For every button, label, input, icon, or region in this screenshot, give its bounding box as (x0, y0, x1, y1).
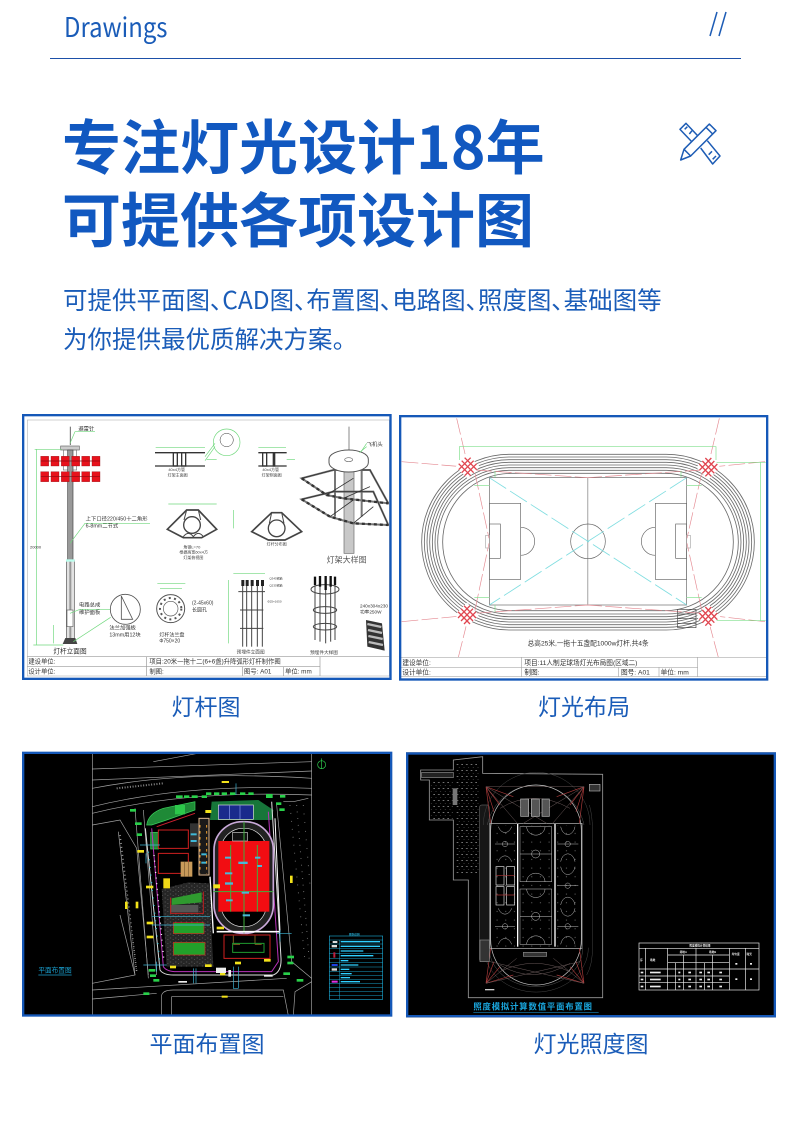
truss captions: 灯杆分布图 (267, 541, 287, 547)
white road tags (178, 968, 273, 983)
title block: 制图: (149, 666, 164, 675)
flange captions: 灯杆法兰盘 (159, 632, 184, 639)
title block: 单位: mm (285, 666, 312, 675)
header label: Drawings (64, 6, 167, 45)
note text: 总高25米,一拖十五盏配1000w灯杆,共4条 (528, 638, 649, 647)
thick dividers (518, 824, 555, 947)
pole labels: 电路总成 (79, 601, 101, 609)
south stand (480, 940, 547, 962)
title block: 建设单位: (28, 657, 56, 666)
title block: 项目:20米一拖十二(6+6盏)升降弧形灯杆制作图 (149, 657, 281, 666)
title block: 图号: A01 (621, 668, 650, 676)
title block: 设计单位: (402, 668, 431, 677)
title block: 单位: mm (661, 667, 689, 676)
red beam fans (486, 787, 584, 983)
icon: pencil and ruler (679, 122, 721, 165)
floodlight (360, 603, 388, 651)
anchor captions: Q345钢筋 (269, 576, 283, 581)
north arrow (318, 758, 326, 769)
anchor cage 3D (311, 576, 339, 643)
illuminance table: 场地A (680, 950, 687, 954)
title block: 建设单位: (402, 658, 431, 667)
title block: 制图: (524, 668, 540, 677)
main title (62, 101, 545, 258)
badminton courts (496, 867, 515, 905)
yellow tags (125, 781, 293, 998)
lamp frame 3D: 灯架大样图 (327, 555, 367, 565)
south building (224, 935, 270, 958)
header slashes (709, 12, 727, 36)
flange plate (157, 595, 185, 623)
flange captions: 长圆孔 (192, 607, 207, 614)
flange captions: (2-45x60) (192, 601, 214, 607)
pole labels (30, 424, 148, 656)
lamp frame 3D: 飞机头 (367, 440, 383, 448)
pole labels: 避雷针 (78, 424, 95, 432)
futsal courts (520, 827, 552, 944)
anchor captions (237, 576, 338, 656)
pole labels: 法兰加强板 (109, 623, 137, 631)
green dimension lines (33, 432, 367, 645)
start lines (678, 609, 696, 628)
light clusters (455, 455, 720, 629)
anchor captions: Φ25×1650 (267, 600, 282, 604)
main title: 可提供各项设计图 (62, 174, 534, 258)
green dimensions (459, 447, 766, 621)
truss captions: 40x4方管 (262, 466, 279, 472)
caption: illuminance plan: 灯光照度图 (534, 1025, 648, 1059)
truss captions (168, 466, 287, 560)
court dots (492, 825, 581, 947)
flange captions: Φ750×20 (159, 639, 180, 645)
truss captions: 灯架侧面图 (262, 472, 282, 478)
running track (422, 454, 754, 630)
dotted verges (117, 783, 310, 972)
illuminance table: 眩光 (747, 952, 752, 956)
floodlight: 功率250W (360, 609, 382, 616)
title block (401, 657, 766, 677)
truss captions: 灯架主面图 (168, 472, 188, 478)
red floodlights (41, 456, 100, 482)
caption: lighting layout: 灯光布局 (538, 688, 630, 722)
panel: site plan (22, 752, 392, 1017)
illuminance table: 照度模拟计算结果 (689, 944, 711, 948)
basketball courts (495, 827, 578, 944)
athletic track and red field (210, 818, 280, 933)
fan plan A (167, 510, 217, 538)
flange stiffener circle (110, 594, 140, 624)
anchor captions: Q235钢筋 (269, 583, 283, 588)
red beam lines (402, 418, 765, 657)
lamp frame 3D (302, 427, 388, 565)
illuminance table: 场地 (650, 958, 656, 962)
west buildings and courts (158, 818, 213, 967)
stadium ovals (483, 772, 593, 992)
title block (27, 420, 389, 676)
truss captions: 灯架俯视图 (183, 554, 203, 560)
drawing title: 平面布置图 (38, 966, 72, 975)
anchor cage elevation (238, 580, 265, 647)
anchor captions: 预埋件大样图 (310, 649, 338, 656)
pole labels: 20000 (30, 545, 42, 550)
building outline (421, 757, 603, 998)
panel: illuminance plan (406, 752, 776, 1018)
main title: 专注灯光设计18年 (62, 101, 545, 186)
panel: pole drawing (22, 414, 392, 680)
title block: 图号: A01 (244, 667, 272, 675)
title block: 设计单位: (28, 666, 56, 675)
intro text (63, 282, 662, 356)
anchor captions: 预埋件立面图 (237, 649, 265, 656)
fan plan B (252, 513, 302, 540)
pole labels: 上下口径220/450十二角形 (86, 514, 148, 522)
header rule (50, 58, 741, 59)
illuminance table: 均匀度 (732, 952, 740, 956)
pole labels: 6-8mm二节式 (86, 522, 119, 530)
blue tennis court (218, 805, 253, 819)
truss details (155, 429, 287, 466)
caption: pole drawing: 灯杆图 (172, 688, 240, 722)
legend table (329, 932, 383, 999)
pole labels: 灯杆立面图 (53, 647, 87, 656)
intro text: 为你提供最优质解决方案。 (63, 321, 345, 356)
pole labels: 维护面板 (79, 608, 101, 616)
soccer field (486, 478, 690, 605)
cyan aiming lines (489, 478, 687, 605)
caption: site plan: 平面布置图 (150, 1025, 264, 1059)
floodlight: 240x304x230 (360, 603, 388, 608)
panel: lighting layout (399, 415, 768, 681)
illuminance table (639, 943, 759, 990)
cyan utility marks (140, 783, 292, 988)
flange captions (159, 601, 214, 645)
pole elevation (61, 427, 79, 644)
pole labels: 13mm用12块 (109, 631, 141, 639)
roads (92, 752, 312, 1016)
truss captions: 角钢L=70 (183, 543, 201, 549)
top small courts (521, 799, 549, 816)
site boundary and green belt (145, 800, 281, 975)
illuminance table: 序 (640, 958, 643, 962)
truss captions: 根据高宽60x4方 (179, 549, 208, 555)
intro text: 可提供平面图、CAD图、布置图、电路图、照度图、基础图等 (63, 282, 662, 317)
illuminance table: 场地B (709, 950, 716, 954)
truss captions: 40x4方管 (168, 466, 185, 472)
green tags (130, 792, 303, 995)
legend table: 图例说明 (349, 932, 360, 936)
drawing title: 照度模拟计算数值平面布置图 (473, 1002, 593, 1012)
title block: 项目:11人制足球场灯光布局图(区域二) (524, 658, 637, 667)
